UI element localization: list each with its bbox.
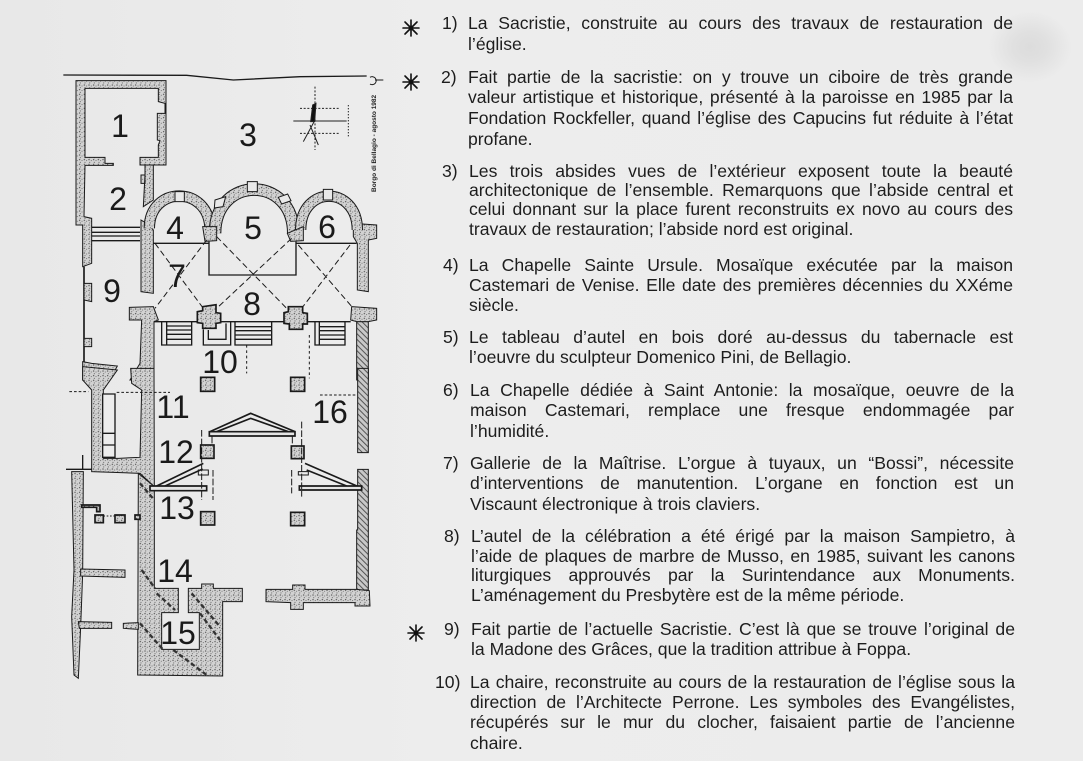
lower plan: nave, side rooms and tower [66,367,370,678]
chancel steps [162,322,345,345]
text block: item 3 [442,161,1013,239]
text block: item 5 [443,327,1013,367]
room numbers on plan: 8 [243,286,261,322]
room numbers on plan [103,108,348,651]
text: L’autel de la célébration a été érigé par la maison Sampietro, à [471,526,1015,546]
room numbers on plan: 6 [318,209,336,245]
room numbers on plan: 12 [158,434,194,470]
text: architectonique de l’ensemble. Remarquons que l’abside central et [469,180,1013,200]
text: maison Castemari, remplace une fresque endommagée par [470,400,1014,420]
text block: item 6 [443,380,1014,441]
west front wall [266,585,370,609]
chapel walls [141,220,153,293]
text: Fondation Rockfeller, quand l’église des Capucins fut réduite à l’état [468,108,1013,128]
upper plan walls and chapels [63,75,383,380]
text: Gallerie de la Maîtrise. L’orgue à tuyaux, un “Bossi”, nécessite [470,453,1014,473]
text block: item 2 [441,67,1013,149]
text: 6) [443,380,459,400]
room numbers on plan: 5 [244,210,262,246]
room 9 west wall [81,267,86,363]
text: liturgiques approuvés par la Surintendance aux Monuments. [471,565,1015,585]
text: récupérés sur le mur du clocher, faisaient partie de l’ancienne [470,712,1015,732]
west outer wall [72,472,83,678]
left pulpit [150,430,213,500]
text: profane. [468,129,533,149]
text: Viscaunt électronique à trois claviers. [470,494,760,514]
asterisk mark: item 1 [402,19,420,37]
text: 3) [442,161,458,181]
text block: item 10 [435,672,1015,753]
text: l’oeuvre du sculpteur Domenico Pini, de Bellagio. [469,347,851,367]
room numbers on plan: 10 [202,344,238,380]
nave columns [201,377,305,526]
text: L’aménagement du Presbytère est de la même période. [471,585,904,605]
room numbers on plan: 14 [157,553,193,589]
room numbers on plan: 2 [109,181,127,217]
room numbers on plan: 9 [103,273,121,309]
text: celui donnant sur la place furent reconstruits ex novo au cours des [469,199,1013,219]
chancel lines [153,242,357,275]
text block: item 7 [443,453,1014,514]
text: La Chapelle Sainte Ursule. Mosaïque exécutée par la maison [469,255,1013,275]
text: 8) [444,526,460,546]
room numbers on plan: 4 [166,210,184,246]
text: 7) [443,453,459,473]
text: l’humidité. [470,421,549,441]
text: Fait partie de l’actuelle Sacristie. C’est là que se trouve l’original de [471,619,1015,639]
text: direction de l’Architecte Perrone. Les symboles des Evangélistes, [470,692,1015,712]
text: l’aide de plaques de marbre de Musso, en 1985, suivant les canons [471,546,1015,566]
apse piers [203,227,303,241]
nave east wall [357,368,368,590]
text block: item 4 [443,255,1013,315]
top boundary line [63,75,367,80]
vault diagonals [155,237,353,308]
room numbers on plan: 11 [156,389,190,425]
apses [149,190,357,233]
text: Les trois absides vues de l’extérieur exposent toute la beauté [469,161,1013,181]
text: La chaire, reconstruite au cours de la restauration de l’église sous la [470,672,1015,692]
side corridor walls [83,367,154,487]
vertical drawing caption: Borgo di Bellagio - agosto 1982 [371,94,378,192]
room numbers on plan: 3 [239,117,257,153]
text: valeur artistique et historique, présenté à la paroisse en 1985 par la [468,87,1013,107]
right pulpit [292,422,362,497]
text: Fait partie de la sacristie: on y trouve un ciboire de très grande [468,67,1013,87]
text block: item 9 [444,619,1015,659]
compass rose [293,87,348,150]
text block: item 1 [442,13,1013,54]
text: siècle. [469,295,519,315]
text: l’église. [468,34,527,54]
text: Castemari de Venise. Elle date des premières décennies du XXéme [469,275,1013,295]
text: 2) [441,67,457,87]
text: 9) [444,619,460,639]
text: 4) [443,255,459,275]
text: Le tableau d’autel en bois doré au-dessus du tabernacle est [469,327,1013,347]
text: la Madone des Grâces, que la tradition attribue à Foppa. [471,639,911,659]
corridor lines between 2 and 4 [92,227,140,241]
text: travaux de restauration; l’abside nord est original. [469,219,853,239]
room numbers on plan: 7 [168,258,186,294]
text: 5) [443,327,459,347]
text: d’interventions de manutention. L’organe en fonction est un [470,473,1014,493]
room numbers on plan: 15 [160,615,196,651]
room numbers on plan: 13 [159,490,195,526]
text: 1) [442,13,458,33]
text: 10) [435,672,460,692]
text: La Sacristie, construite au cours des travaux de restauration de [468,13,1013,33]
nave pillars and walls [129,307,158,380]
room numbers on plan: 16 [312,394,348,430]
inner partition walls [78,569,138,629]
text: chaire. [470,733,523,753]
central pediment [209,413,295,443]
south tower and room 15 walls [138,473,242,676]
text block: item 8 [444,526,1015,605]
room numbers on plan: 1 [111,108,129,144]
sacristy walls [76,81,166,267]
text: La Chapelle dédiée à Saint Antonie: la mosaïque, oeuvre de la [470,380,1014,400]
asterisk mark: item 2 [402,73,420,91]
asterisk mark: item 9 [407,624,425,642]
